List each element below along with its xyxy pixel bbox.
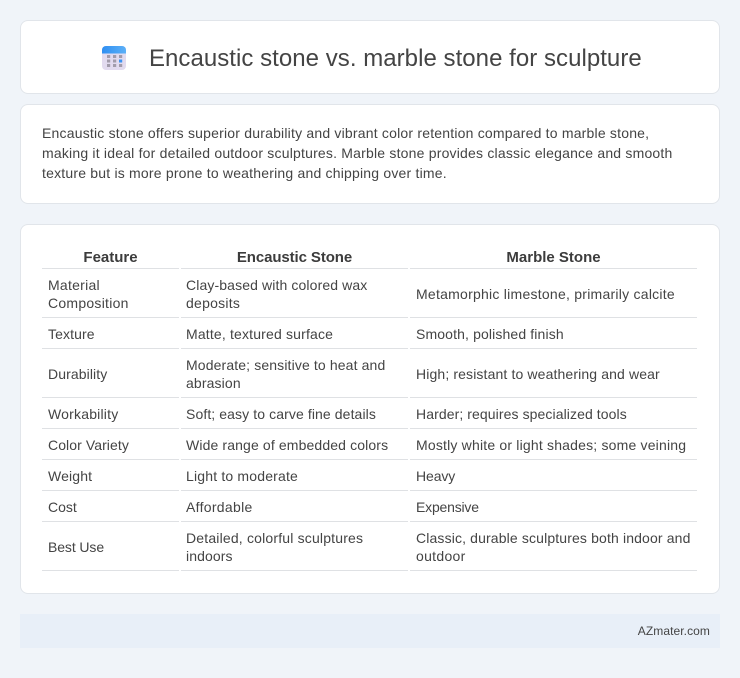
row: weight	[48, 468, 456, 484]
row: workability	[48, 406, 627, 422]
row: best use	[48, 530, 691, 564]
text block: summary: making it ideal for detailed outdoor sculptures. Marble stone provides classic elegance and smooth	[42, 145, 672, 161]
text: Detailed, colorful sculptures	[186, 530, 363, 546]
text: Durability	[48, 366, 107, 382]
text: Cost	[48, 499, 77, 515]
text: deposits	[186, 295, 240, 311]
text: Affordable	[186, 499, 253, 515]
text block: summary: texture but is more prone to weathering and chipping over time.	[42, 165, 447, 181]
text: Material	[48, 277, 100, 293]
text: Heavy	[416, 468, 455, 484]
text: Moderate; sensitive to heat and	[186, 357, 385, 373]
text: Color Variety	[48, 437, 129, 453]
text: Encaustic Stone	[237, 249, 352, 266]
row: color variety	[48, 437, 686, 453]
text: abrasion	[186, 375, 241, 391]
panel: comparison table	[20, 224, 720, 594]
row: material composition	[48, 277, 675, 311]
text: Matte, textured surface	[186, 326, 333, 342]
row: cost	[48, 499, 479, 515]
footer credit: AZmater.com	[638, 624, 710, 638]
text: Soft; easy to carve fine details	[186, 406, 376, 422]
text: Light to moderate	[186, 468, 298, 484]
text: Expensive	[416, 499, 479, 515]
text: Texture	[48, 326, 95, 342]
text block: summary	[42, 125, 672, 181]
text: Clay-based with colored wax	[186, 277, 367, 293]
text block: summary: Encaustic stone offers superior durability and vibrant color retention compared to marble stone,	[42, 125, 649, 141]
text: Weight	[48, 468, 92, 484]
panel: summary	[20, 104, 720, 204]
icon: calendar	[102, 46, 126, 70]
text: Marble Stone	[506, 249, 601, 266]
row: texture	[48, 326, 564, 342]
text: indoors	[186, 548, 233, 564]
text: Workability	[48, 406, 118, 422]
text: Wide range of embedded colors	[186, 437, 388, 453]
panel: title	[20, 20, 720, 94]
heading: Encaustic stone vs. marble stone for sculpture	[149, 45, 642, 72]
text: Metamorphic limestone, primarily calcite	[416, 286, 675, 302]
text: Composition	[48, 295, 129, 311]
text: Classic, durable sculptures both indoor and	[416, 530, 691, 546]
text: Harder; requires specialized tools	[416, 406, 627, 422]
text: High; resistant to weathering and wear	[416, 366, 660, 382]
text: Smooth, polished finish	[416, 326, 564, 342]
table header	[83, 249, 601, 266]
text: Feature	[83, 249, 138, 266]
text: Best Use	[48, 539, 104, 555]
footer bar	[20, 614, 720, 648]
row: durability	[48, 357, 660, 391]
text: Mostly white or light shades; some veining	[416, 437, 686, 453]
text: outdoor	[416, 548, 466, 564]
